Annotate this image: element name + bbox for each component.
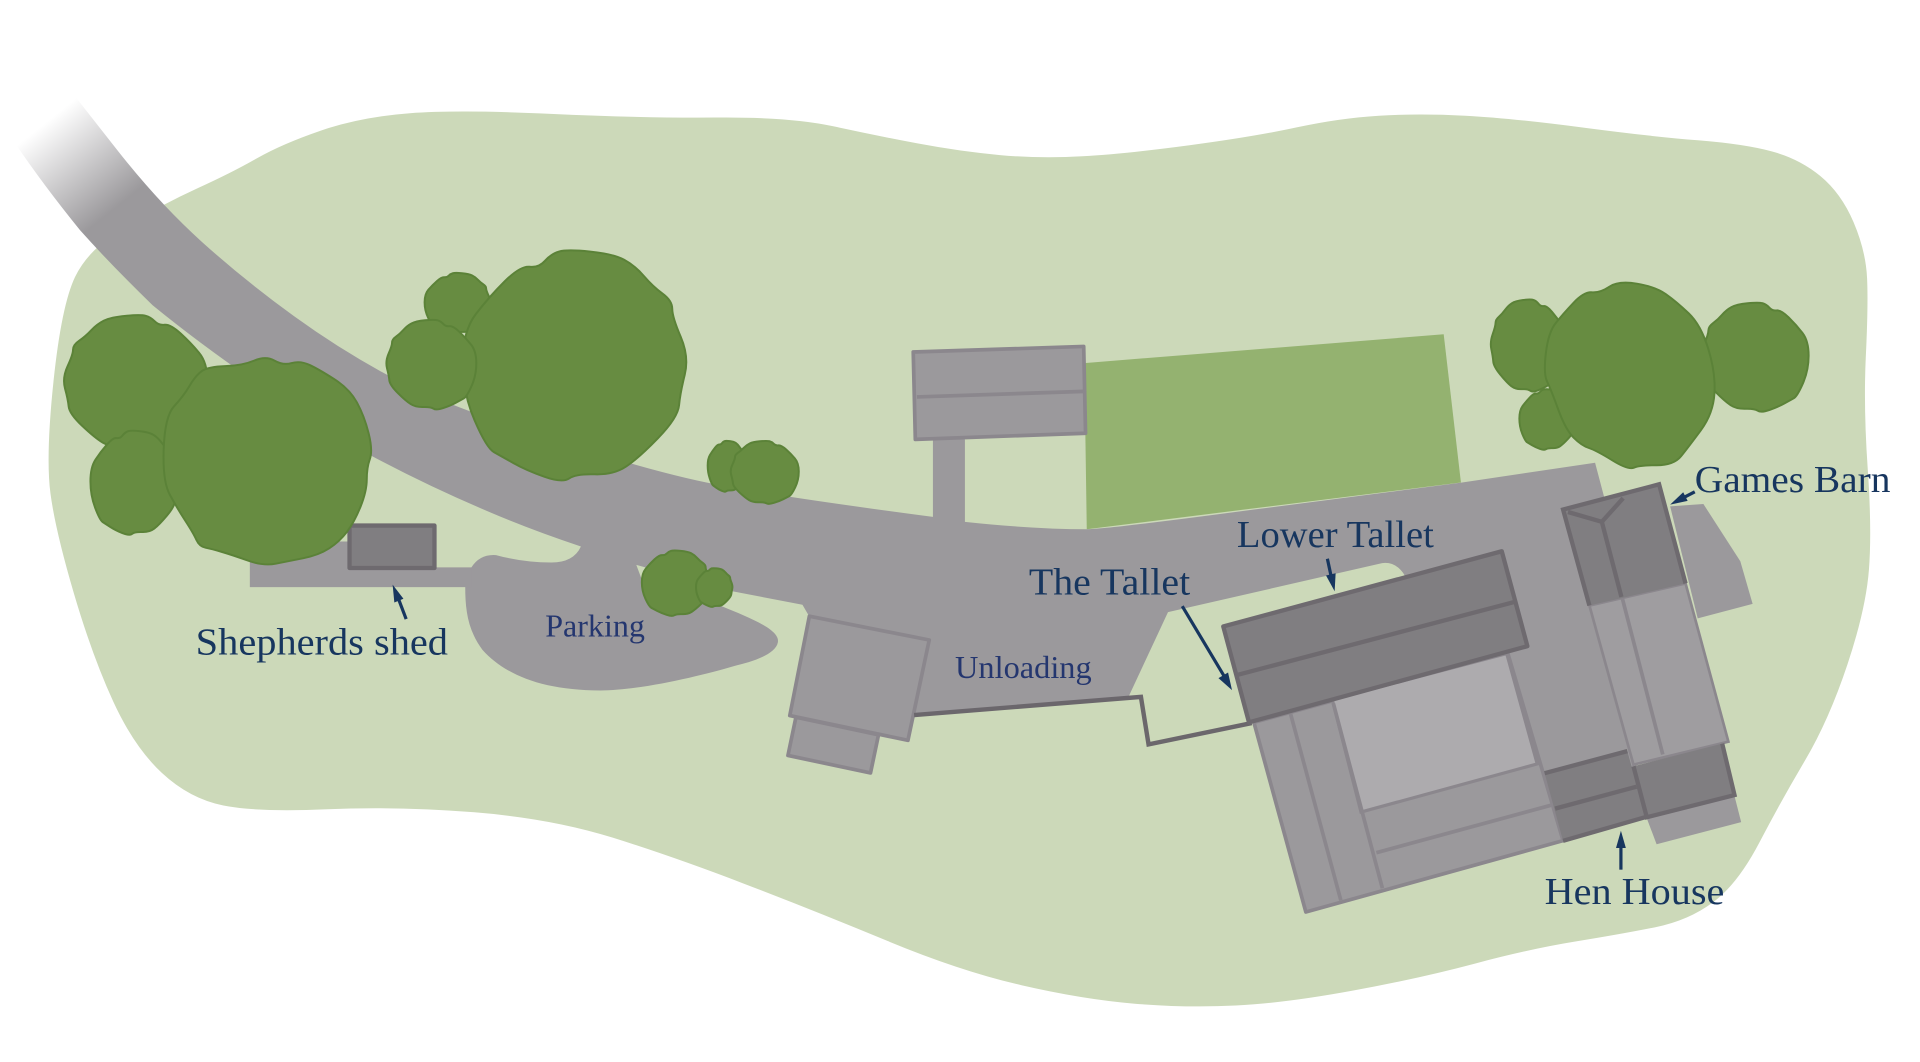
Hen House roof bbox=[1545, 751, 1646, 841]
small lean-to below barn bbox=[1647, 796, 1741, 844]
unloading building bbox=[788, 616, 929, 773]
Tallet range bbox=[1254, 653, 1563, 912]
label: Hen House: Hen House bbox=[1545, 871, 1724, 913]
boundary wall bbox=[914, 697, 1252, 744]
label: Lower Tallet: Lower Tallet bbox=[1237, 514, 1434, 556]
shed access strip bbox=[250, 542, 471, 587]
trees: centre cluster bbox=[386, 250, 686, 480]
arrow: Lower Tallet bbox=[1326, 559, 1336, 591]
label: Unloading: Unloading bbox=[955, 650, 1092, 685]
field bbox=[1084, 334, 1461, 529]
arrow: Hen House bbox=[1616, 831, 1626, 870]
right yard apron bbox=[1670, 504, 1753, 618]
trees: parking pair bbox=[642, 550, 732, 616]
trees: left cluster bbox=[64, 315, 371, 564]
top building bbox=[913, 346, 1086, 439]
label: The Tallet: The Tallet bbox=[1029, 561, 1191, 603]
label: Shepherds shed: Shepherds shed bbox=[196, 621, 448, 663]
label: Parking: Parking bbox=[545, 608, 645, 643]
label: Games Barn: Games Barn bbox=[1695, 459, 1890, 501]
arrow: Shepherds shed bbox=[393, 585, 406, 619]
trees: small pair on road bbox=[708, 441, 799, 504]
barn end roof bbox=[1633, 744, 1735, 817]
Shepherds shed building bbox=[350, 526, 434, 568]
arrow: Games Barn bbox=[1670, 492, 1695, 505]
trees: right cluster bbox=[1491, 283, 1809, 468]
road and yard bbox=[15, 95, 1637, 788]
arrow: The Tallet bbox=[1182, 606, 1232, 690]
Games Barn bbox=[1563, 484, 1728, 765]
grass background bbox=[49, 112, 1870, 1006]
Lower Tallet roof bbox=[1223, 551, 1527, 722]
